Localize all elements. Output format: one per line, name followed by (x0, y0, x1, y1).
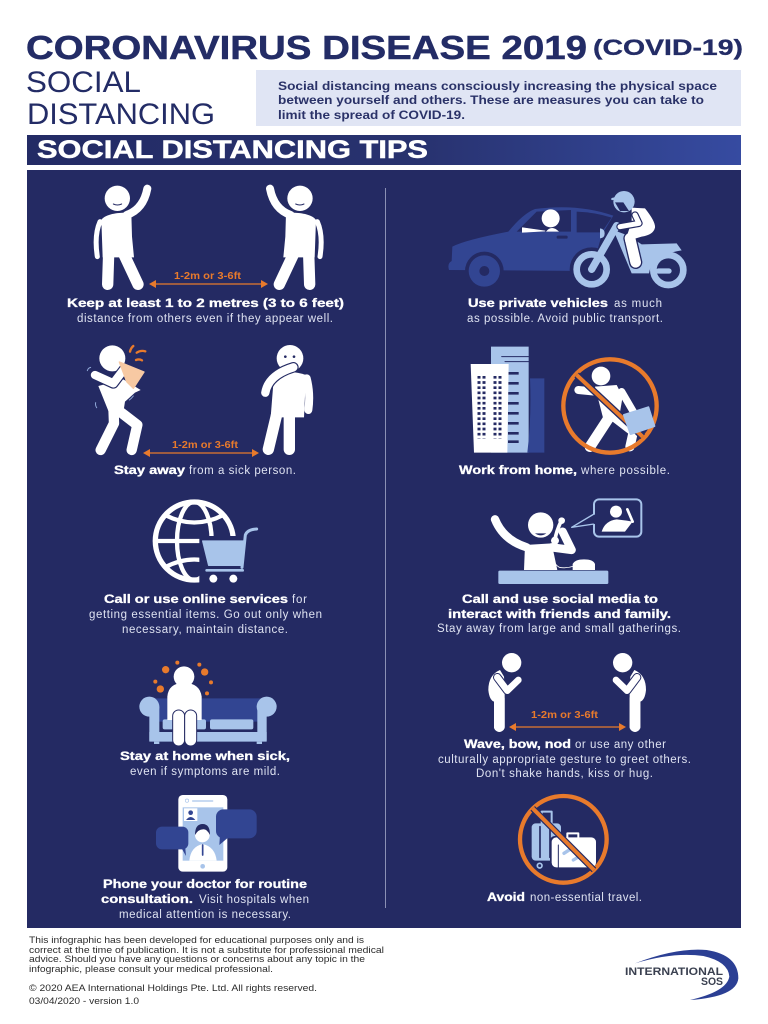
text: social media: interact with friends and family. (448, 609, 671, 621)
tip: stay at home (120, 661, 290, 778)
text: private vehicles: Use private vehicles (468, 298, 608, 310)
logo: International SOS (625, 950, 738, 1000)
text: work from home (459, 465, 670, 477)
text: online services: getting essential items. Go out only when (89, 609, 322, 621)
arrow: distance 3: 1-2m or 3-6ft (531, 709, 599, 721)
subtitle: SOCIAL (26, 66, 141, 99)
text: stay at home (120, 751, 290, 778)
text: online services (89, 594, 322, 636)
icon: globe and cart (155, 502, 257, 587)
tip: online services (89, 502, 322, 636)
text: social media: Call and use social media to (462, 594, 658, 606)
intro text block: Social distancing means consciously increasing the physical space (278, 79, 717, 93)
icon: car and motorbike (448, 191, 683, 291)
tip: avoid travel (487, 796, 642, 904)
logo: International SOS: INTERNATIONAL (625, 966, 723, 978)
text: stay at home: even if symptoms are mild. (130, 766, 280, 778)
arrow: distance 1 (149, 270, 268, 288)
text: online services: necessary, maintain distance. (122, 624, 288, 636)
text: keep distance (67, 298, 344, 325)
icon: phone with doctor (156, 795, 257, 872)
text: wave bow nod: Don't shake hands, kiss or hug. (476, 768, 653, 780)
tip: stay away (87, 345, 309, 477)
text: work from home: where possible. (580, 465, 670, 477)
tip: social media (437, 499, 681, 635)
text: avoid travel: non-essential travel. (530, 892, 642, 904)
text: avoid travel: Avoid (487, 892, 525, 904)
text: phone doctor (101, 879, 309, 921)
icon: buildings and no commuter (471, 347, 657, 453)
icon: two people at distance (96, 186, 321, 284)
text: social media: Stay away from large and small gatherings. (437, 623, 681, 635)
title: CORONAVIRUS DISEASE 2019 (26, 29, 587, 66)
heading: social distancing tips (27, 135, 741, 165)
text: phone doctor: Visit hospitals when (199, 894, 309, 906)
text: stay away (114, 465, 296, 477)
arrow: distance 3 (509, 709, 626, 731)
tip: phone doctor (101, 795, 309, 921)
text: social media (437, 594, 681, 635)
footer disclaimer: © 2020 AEA International Holdings Pte. Ltd. All rights reserved. (29, 982, 317, 993)
footer disclaimer: infographic, please consult your medical professional. (29, 963, 273, 974)
text: wave bow nod: or use any other (575, 739, 666, 751)
heading: social distancing tips: SOCIAL DISTANCING TIPS (37, 136, 428, 164)
text: stay at home: Stay at home when sick, (120, 751, 290, 763)
text: stay away: from a sick person. (189, 465, 296, 477)
footer disclaimer: This infographic has been developed for educational purposes only and is (29, 934, 364, 945)
arrow: distance 2: 1-2m or 3-6ft (172, 439, 239, 451)
tip: wave bow nod (438, 653, 691, 780)
text: keep distance: distance from others even if they appear well. (77, 313, 333, 325)
tip: work from home (459, 347, 670, 477)
subtitle (26, 66, 215, 131)
text: work from home: Work from home, (459, 465, 577, 477)
icon: no luggage (520, 796, 607, 883)
footer disclaimer: advice. Should you have any questions or concerns about any topic in the (29, 953, 365, 964)
text: phone doctor: consultation. (101, 894, 193, 906)
intro text block: between yourself and others. These are measures you can take to (278, 93, 705, 107)
text: stay away: Stay away (114, 465, 186, 477)
arrow: distance 1: 1-2m or 3-6ft (174, 270, 242, 282)
panel: tips (27, 170, 741, 928)
icon: person on sofa (139, 661, 277, 746)
footer disclaimer: 03/04/2020 - version 1.0 (29, 995, 139, 1006)
icon: sick people (87, 345, 309, 450)
intro text block (256, 70, 741, 126)
arrow: distance 2 (143, 439, 259, 457)
text: private vehicles: as possible. Avoid public transport. (467, 313, 663, 325)
icon: person on phone (495, 499, 641, 584)
footer disclaimer: correct at the time of publication. It is not a substitute for professional medical (29, 944, 384, 955)
tip: private vehicles (448, 191, 683, 325)
tip: keep distance (67, 186, 344, 325)
text: phone doctor: Phone your doctor for routine (103, 879, 307, 891)
text: wave bow nod: culturally appropriate gesture to greet others. (438, 754, 691, 766)
text: private vehicles: as much (614, 298, 662, 310)
text: wave bow nod (438, 739, 691, 780)
text: online services: for (292, 594, 307, 606)
title: (COVID-19) (593, 35, 743, 60)
text: online services: Call or use online services (104, 594, 288, 606)
icon: bowing people (488, 653, 646, 732)
text: keep distance: Keep at least 1 to 2 metres (3 to 6 feet) (67, 298, 344, 310)
text: phone doctor: medical attention is necessary. (119, 909, 291, 921)
logo: International SOS: SOS (701, 976, 723, 988)
subtitle: DISTANCING (27, 98, 215, 131)
text: private vehicles (467, 298, 663, 325)
intro text block: limit the spread of COVID-19. (278, 108, 465, 122)
footer disclaimer (29, 934, 384, 1006)
title (26, 29, 743, 66)
text: wave bow nod: Wave, bow, nod (464, 739, 571, 751)
